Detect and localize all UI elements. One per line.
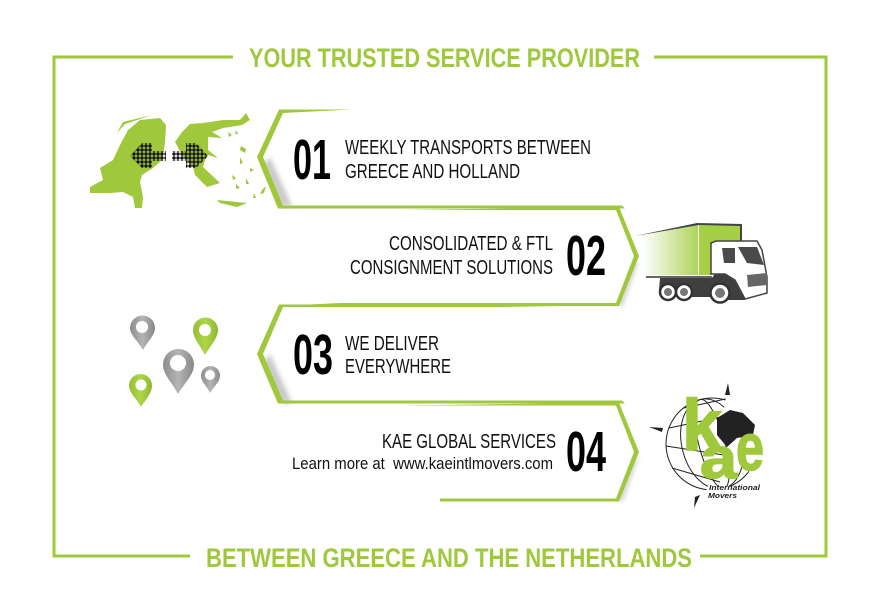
text 04: KAE GLOBAL SERVICES (382, 431, 556, 453)
outer frame (54, 57, 826, 556)
logo: k: k (682, 386, 723, 466)
text 03: EVERYWHERE (345, 356, 451, 378)
title: YOUR TRUSTED SERVICE PROVIDER (249, 43, 640, 73)
logo: e: e (736, 410, 764, 484)
logo: International Movers: Movers (708, 491, 737, 500)
logo: International Movers (708, 483, 761, 500)
text 01: GREECE AND HOLLAND (345, 161, 520, 183)
panel 3: we deliver (257, 304, 625, 404)
text 01 (345, 137, 591, 183)
arrows: dotted (130, 143, 166, 168)
truck: wheels (660, 284, 730, 302)
text 04: Learn more at www.kaeintlmovers.com (292, 454, 553, 473)
map: Netherlands (90, 115, 166, 208)
pin: green top right (193, 318, 218, 355)
icon: maps of Netherlands and Greece with arrows (90, 113, 266, 208)
icon: truck (635, 223, 767, 302)
logo: compass points (649, 383, 730, 508)
panel 2: consolidated (280, 207, 639, 307)
icon: map pins (129, 316, 220, 407)
pin: grey centre (163, 349, 194, 394)
text 02: CONSIGNMENT SOLUTIONS (350, 257, 553, 279)
text 02: CONSOLIDATED & FTL (389, 233, 553, 255)
truck: cab (711, 241, 767, 299)
pin: green bottom left (129, 374, 152, 407)
text 03 (345, 333, 451, 378)
pin: grey top left (130, 316, 155, 350)
panel 4: KAE global services (292, 402, 639, 502)
text 04 (292, 431, 556, 473)
text 02 (350, 233, 553, 279)
truck: chassis (659, 272, 745, 300)
logo: International Movers: International (709, 483, 761, 492)
number 04: 04 (566, 420, 606, 484)
truck: cargo box (643, 225, 698, 275)
logo: globe (666, 398, 750, 490)
text 03: WE DELIVER (345, 333, 439, 355)
map: Greece (175, 113, 266, 207)
number 02: 02 (566, 224, 606, 288)
number 03: 03 (293, 323, 333, 387)
number 01: 01 (293, 128, 331, 192)
logo: dark continent (717, 410, 755, 447)
logo: a: a (700, 426, 738, 491)
panel 1: weekly transports (257, 110, 625, 208)
icon: KAE logo (649, 383, 764, 508)
pin: grey small right (201, 366, 220, 393)
text 01: WEEKLY TRANSPORTS BETWEEN (345, 137, 591, 159)
subtitle: BETWEEN GREECE AND THE NETHERLANDS (206, 543, 692, 573)
